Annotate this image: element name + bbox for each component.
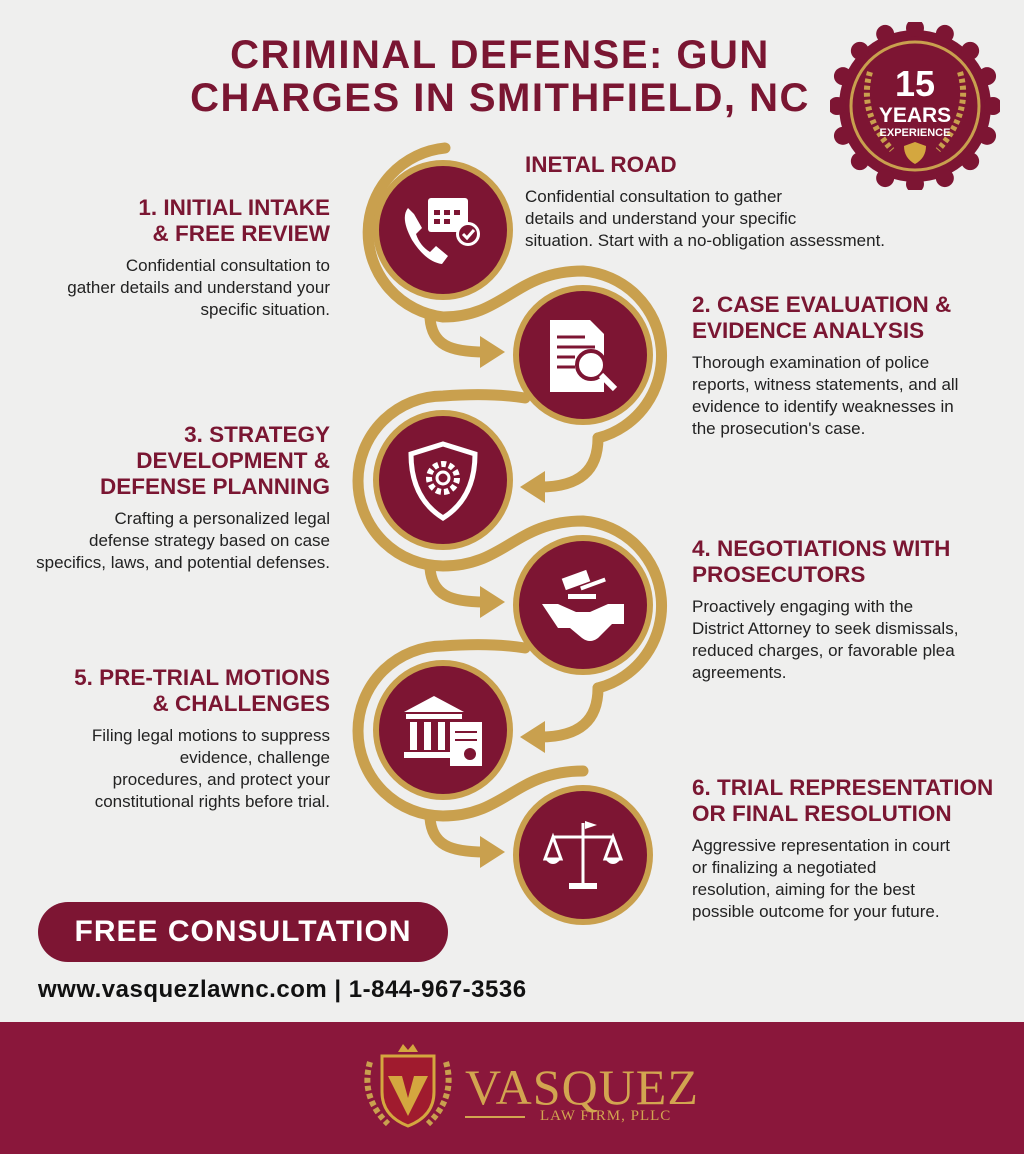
CTA button: FREE CONSULTATION [74,915,411,948]
step 2: 2. CASE EVALUATION & [692,292,951,317]
step 4: 4. NEGOTIATIONS WITH [692,536,950,561]
step 1: & FREE REVIEW [152,221,330,246]
text: initial road: INETAL ROAD [525,152,677,177]
step 5 [74,665,330,811]
title: CHARGES IN SMITHFIELD, NC [190,76,810,120]
icon: scales [543,821,623,889]
badge: 15 years experience: 15 [895,63,935,104]
step 3: specifics, laws, and potential defenses. [36,553,330,572]
step 5: procedures, and protect your [113,770,330,789]
step 4: District Attorney to seek dismissals, [692,619,958,638]
text: initial road [525,152,885,250]
step 6: 6. TRIAL REPRESENTATION [692,775,993,800]
text: initial road: Confidential consultation to gather [525,187,782,206]
step 4: agreements. [692,663,786,682]
step 5: 5. PRE-TRIAL MOTIONS [74,665,330,690]
footer [0,1022,1024,1154]
badge: 15 years experience: EXPERIENCE [880,127,950,139]
step 4: Proactively engaging with the [692,597,913,616]
step 3: defense strategy based on case [89,531,330,550]
step 6 [692,775,993,921]
step 3: Crafting a personalized legal [115,509,330,528]
CTA button [38,902,448,962]
icon: gavel handshake [542,570,624,641]
text: initial road: details and understand your specific [525,209,796,228]
badge: 15 years experience [830,22,1000,190]
step 5: & CHALLENGES [152,691,330,716]
step 6: OR FINAL RESOLUTION [692,801,952,826]
step 3: DEFENSE PLANNING [100,474,330,499]
step 1: gather details and understand your [67,278,330,297]
step 6: or finalizing a negotiated [692,858,876,877]
logo text: VASQUEZ [465,1059,699,1115]
text: initial road: situation. Start with a no-obligation assessment. [525,231,885,250]
step 2: evidence to identify weaknesses in [692,397,954,416]
step 3: 3. STRATEGY [184,422,330,447]
step 4: PROSECUTORS [692,562,865,587]
title: CRIMINAL DEFENSE: GUN [230,33,770,77]
badge: 15 years experience: YEARS [879,104,951,127]
step 1: Confidential consultation to [126,256,330,275]
step 6: Aggressive representation in court [692,836,950,855]
icon: phone calendar [404,198,480,264]
step 5: constitutional rights before trial. [95,792,330,811]
step 5: evidence, challenge [180,748,330,767]
icon: courthouse document [404,696,482,766]
step 3 [36,422,330,572]
footer: LAW FIRM, PLLC [540,1108,671,1124]
step 6: possible outcome for your future. [692,902,940,921]
step 2: Thorough examination of police [692,353,929,372]
step 2 [692,292,958,438]
icon: shield gear [408,441,478,521]
step 5: Filing legal motions to suppress [92,726,330,745]
logo crest [364,1044,452,1128]
step 1: 1. INITIAL INTAKE [138,195,330,220]
step 1 [67,195,330,319]
step 4 [692,536,958,682]
icon: document magnifier [550,320,618,392]
step 4: reduced charges, or favorable plea [692,641,955,660]
step 2: reports, witness statements, and all [692,375,958,394]
step 1: specific situation. [201,300,330,319]
step 2: EVIDENCE ANALYSIS [692,318,924,343]
step 2: the prosecution's case. [692,419,865,438]
contact line: www.vasquezlawnc.com | 1-844-967-3536 [38,976,527,1003]
step 6: resolution, aiming for the best [692,880,915,899]
step 3: DEVELOPMENT & [136,448,330,473]
title [190,33,810,120]
